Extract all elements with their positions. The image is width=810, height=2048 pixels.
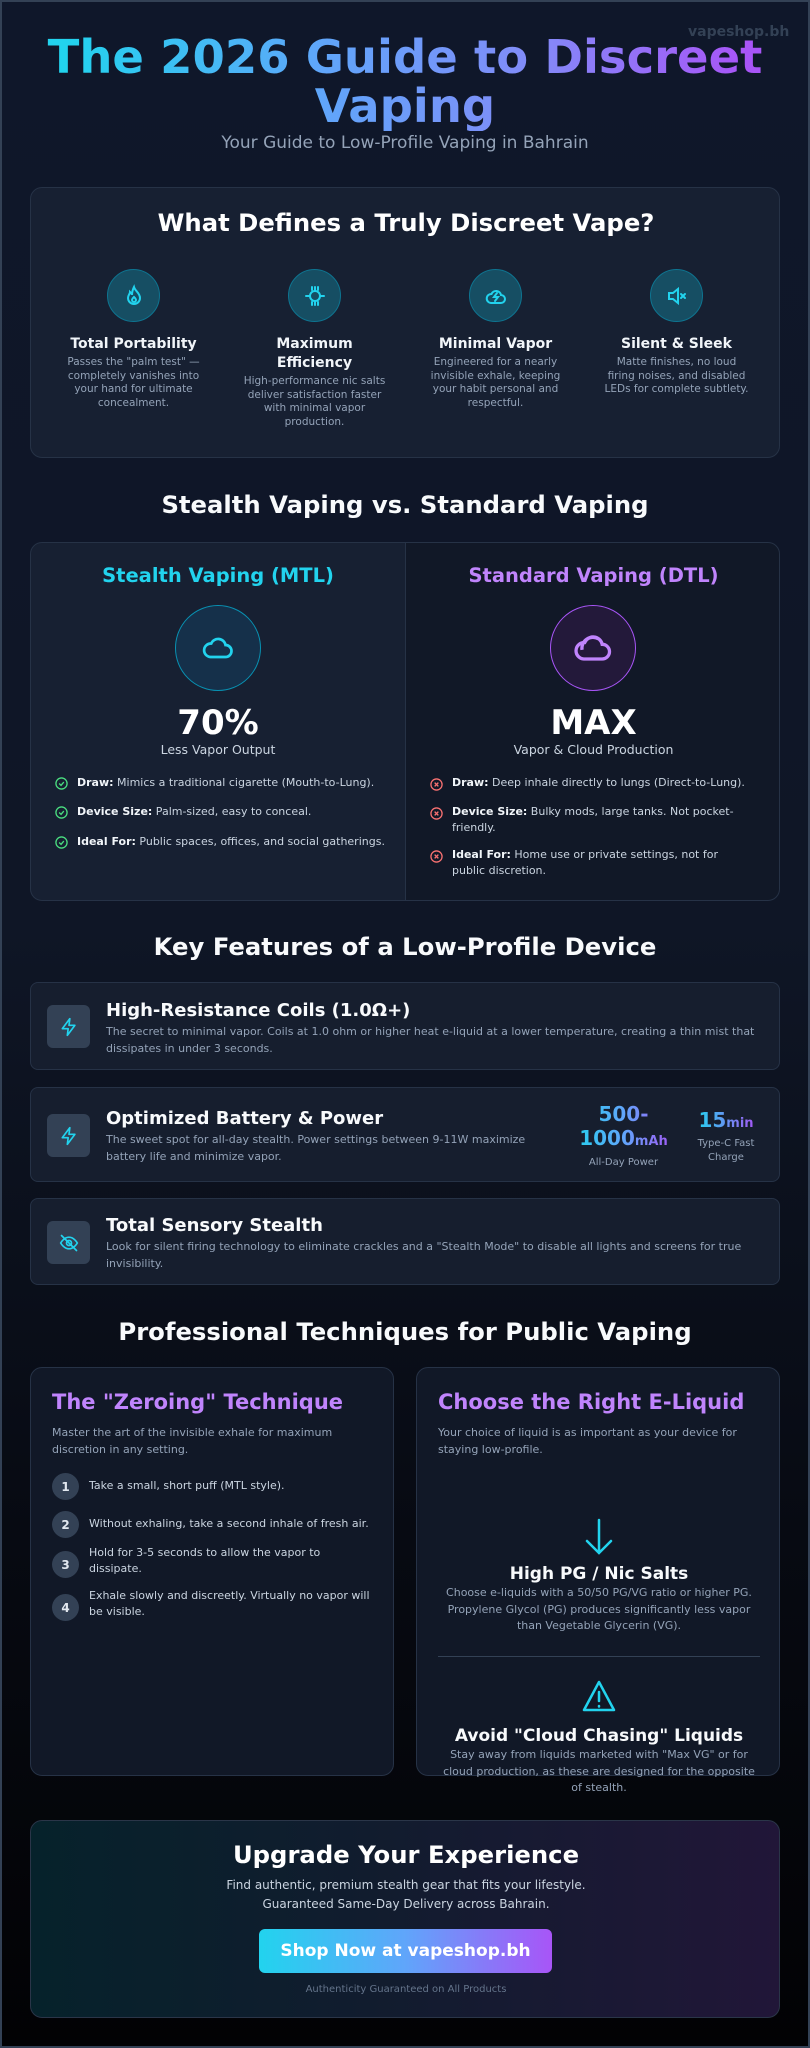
watermark: vapeshop.bh — [688, 24, 789, 40]
subtitle: Your Guide to Low-Profile Vaping in Bahrain — [221, 133, 589, 153]
column: stealth — [55, 564, 385, 849]
steps: 2 — [61, 1518, 70, 1532]
icon: bolt — [47, 1114, 90, 1157]
feature: minimal vapor: Minimal Vapor — [439, 336, 552, 352]
feature: portability: Passes the "palm test" — completely vanishes into your hand for ultimate concealment. — [67, 356, 200, 408]
icon: small cloud — [175, 605, 261, 691]
icon: cloud — [469, 269, 522, 322]
panel: e-liquid: Your choice of liquid is as important as your device for staying low-profile. — [438, 1426, 737, 1456]
card: coils: The secret to minimal vapor. Coils at 1.0 ohm or higher heat e-liquid at a lower temperature, creating a thin mist that dissipates in under 3 seconds. — [106, 1025, 754, 1054]
card: battery — [30, 1087, 780, 1182]
stat: 15min: Type-C Fast Charge — [698, 1138, 754, 1163]
card: coils: High-Resistance Coils (1.0Ω+) — [106, 1000, 410, 1021]
stat: mAh: 500- — [598, 1102, 649, 1126]
CTA footer: Authenticity Guaranteed on All Products — [306, 1984, 506, 1995]
feature: efficiency — [244, 269, 385, 428]
heading: standard: Standard Vaping (DTL) — [468, 564, 719, 587]
title: Vaping — [315, 79, 495, 133]
feature: silent — [604, 269, 748, 395]
stat: MAX: MAX — [550, 703, 637, 743]
CTA text — [226, 1878, 586, 1911]
steps: 3 — [61, 1558, 70, 1572]
bullets: standard: Device Size: Bulky mods, large tanks. Not pocket-friendly. — [452, 805, 734, 834]
bullets: standard: Ideal For: Home use or private settings, not for public discretion. — [452, 848, 718, 877]
bullets: standard: Draw: Deep inhale directly to lungs (Direct-to-Lung). — [452, 776, 745, 789]
bullets: stealth: Draw: Mimics a traditional cigarette (Mouth-to-Lung). — [77, 776, 374, 789]
block: avoid cloud chasing: Stay away from liquids marketed with "Max VG" or for cloud production, as these are designed for the opposite of stealth. — [443, 1748, 755, 1794]
column: stealth: Less Vapor Output — [161, 742, 275, 757]
stat: 15min: 15min — [698, 1108, 754, 1132]
icon: flame — [107, 269, 160, 322]
card: sensory: Total Sensory Stealth — [106, 1215, 323, 1236]
card: battery: Optimized Battery & Power — [106, 1108, 383, 1129]
block: high PG: High PG / Nic Salts — [510, 1564, 688, 1584]
icon: big cloud — [550, 605, 636, 691]
CTA button — [259, 1929, 552, 1973]
icon: mute — [650, 269, 703, 322]
heading: stealth: Stealth Vaping (MTL) — [102, 564, 334, 587]
block: avoid cloud chasing — [443, 1726, 755, 1794]
title — [0, 33, 810, 131]
heading: key features: Key Features of a Low-Profile Device — [154, 932, 656, 961]
heading: techniques: Professional Techniques for Public Vaping — [118, 1317, 692, 1346]
card: coils — [30, 982, 780, 1070]
icon: warning — [582, 1680, 616, 1712]
panel: zeroing — [30, 1367, 394, 1776]
stat: mAh — [579, 1102, 668, 1168]
feature: efficiency: Efficiency — [277, 355, 352, 371]
panel: zeroing: Master the art of the invisible exhale for maximum discretion in any setting. — [52, 1426, 332, 1456]
steps — [52, 1473, 370, 1621]
block: avoid cloud chasing: Avoid "Cloud Chasing" Liquids — [455, 1726, 743, 1746]
stat: 70%: 70% — [177, 703, 259, 743]
icon: bolt — [47, 1005, 90, 1048]
title: The 2026 Guide to Discreet — [48, 30, 762, 84]
heading: zeroing: The "Zeroing" Technique — [52, 1390, 343, 1414]
icon: eye off — [47, 1221, 90, 1264]
feature: minimal vapor: Engineered for a nearly invisible exhale, keeping your habit personal and respectful. — [431, 356, 560, 408]
stat: 15min — [698, 1108, 754, 1163]
CTA text: Guaranteed Same-Day Delivery across Bahrain. — [262, 1897, 550, 1911]
feature: silent: Silent & Sleek — [621, 336, 732, 352]
steps: 1 — [61, 1480, 70, 1494]
bullets: stealth — [55, 776, 385, 849]
steps: Without exhaling, take a second inhale of fresh air. — [89, 1517, 369, 1530]
bullets: stealth: Device Size: Palm-sized, easy to conceal. — [77, 805, 311, 818]
feature: efficiency: High-performance nic salts deliver satisfaction faster with minimal vapor production. — [244, 375, 385, 428]
block: high PG — [446, 1564, 752, 1632]
column: standard: Vapor & Cloud Production — [514, 742, 673, 757]
panel: comparison — [30, 542, 780, 901]
steps: Take a small, short puff (MTL style). — [89, 1479, 284, 1492]
heading: comparison: Stealth Vaping vs. Standard Vaping — [161, 490, 649, 519]
card: sensory — [30, 1198, 780, 1285]
stat: mAh: All-Day Power — [589, 1157, 658, 1168]
CTA heading: Upgrade Your Experience — [233, 1840, 579, 1869]
icon: arrow down — [586, 1518, 612, 1555]
column: standard — [430, 564, 745, 877]
CTA text: Find authentic, premium stealth gear that fits your lifestyle. — [226, 1878, 586, 1892]
heading: what defines: What Defines a Truly Discreet Vape? — [158, 208, 654, 237]
feature: silent: Matte finishes, no loud firing noises, and disabled LEDs for complete subtlety. — [604, 356, 748, 395]
CTA button: Shop Now at vapeshop.bh — [280, 1941, 531, 1961]
feature: minimal vapor — [431, 269, 560, 408]
icon: chip — [288, 269, 341, 322]
heading: e-liquid: Choose the Right E-Liquid — [438, 1390, 744, 1414]
bullets: stealth: Ideal For: Public spaces, offices, and social gatherings. — [77, 835, 385, 848]
card: sensory: Look for silent firing technology to eliminate crackles and a "Stealth Mode" to disable all lights and screens for true invisibility. — [106, 1240, 741, 1270]
feature: portability: Total Portability — [70, 336, 197, 352]
steps: 4 — [61, 1600, 70, 1614]
panel: e-liquid — [416, 1367, 780, 1776]
stat: mAh: 1000mAh — [579, 1126, 668, 1150]
block: high PG: Choose e-liquids with a 50/50 PG/VG ratio or higher PG. Propylene Glycol (PG) produces significantly less vapor than Vegetable Glycerin (VG). — [446, 1586, 752, 1632]
CTA panel — [30, 1820, 780, 2018]
feature: portability — [67, 269, 200, 408]
steps: Hold for 3-5 seconds to allow the vapor to dissipate. — [89, 1546, 320, 1575]
bullets: standard — [430, 776, 745, 877]
steps: Exhale slowly and discreetly. Virtually no vapor will be visible. — [89, 1589, 370, 1618]
card: battery: The sweet spot for all-day stealth. Power settings between 9-11W maximize battery life and minimize vapor. — [106, 1133, 525, 1162]
feature: efficiency: Maximum — [276, 336, 353, 352]
panel: what defines — [30, 187, 780, 458]
